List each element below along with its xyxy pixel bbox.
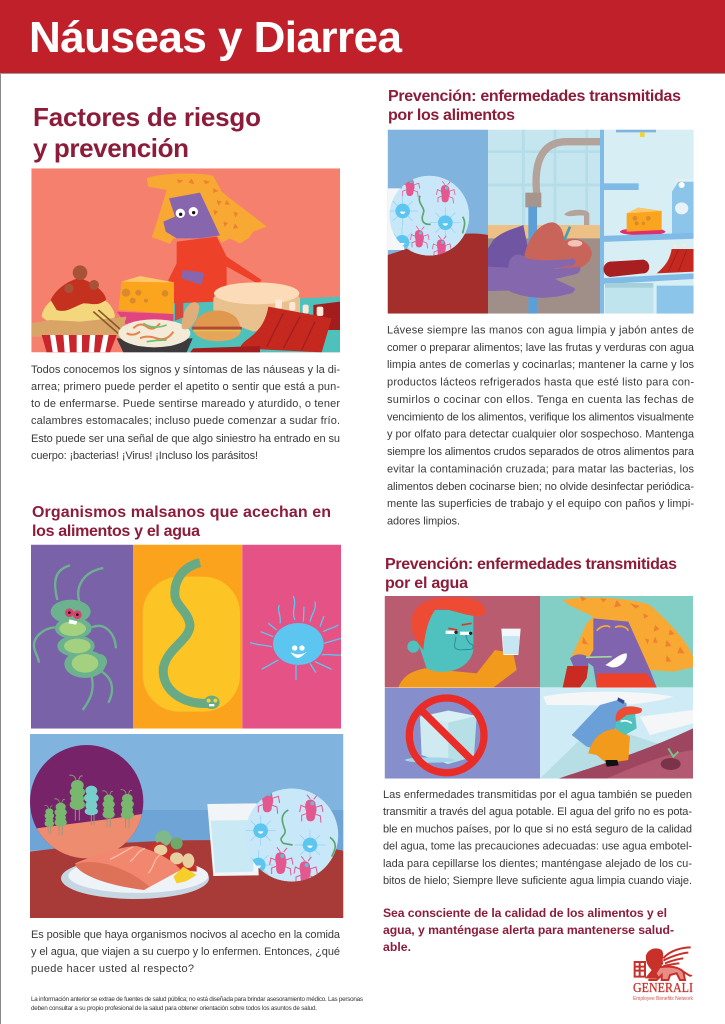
plate [61,866,209,899]
body text: waterborne prevention: lada para cepillarse los dientes; manténgase alejado de los cu- [383,858,692,870]
drawers [605,288,654,314]
body text: introduction: to de enfermarse. Puede sentirse mareado y aturdido, o tener [31,398,340,410]
logo wordmark: GENERALI [633,980,693,995]
illustration: foodborne prevention triptych [387,130,694,314]
wedge of cheese [117,312,173,325]
illustration: woman feeling sick at food table [31,168,340,352]
panel: virus [242,545,341,729]
body text: foodborne prevention: productos lácteos refrigerados hasta que esté listo para con- [387,377,694,389]
footnote disclaimer: deben consultar a su propio profesional de la salud para obtener orientación sobre todos los asuntos de salud. [31,1005,317,1012]
panel: washing an apple [488,130,602,314]
sweater [168,237,262,307]
illustration: waterborne prevention grid [385,596,693,779]
panel: refrigerator [600,130,694,314]
body text: foodborne prevention: y por olfato para detectar cualquier olor sospechoso. Mantenga [387,429,695,441]
callout: closing message [383,906,674,954]
body text: introduction: Esto puede ser una señal de que algo siniestro ha entrado en su [31,433,340,445]
vegetables [155,830,171,846]
ribs [657,249,694,273]
body text: waterborne prevention: Las enfermedades transmitidas por el agua también se pueden [383,789,692,801]
page edge [0,0,1,1024]
milk carton [672,182,694,235]
footnote disclaimer [31,996,363,1012]
table [167,297,340,352]
body text: foodborne prevention [387,324,695,528]
round cheese [213,296,300,332]
shelf cheese [620,229,666,235]
hair [147,174,267,244]
panel: worm [133,545,242,729]
body text: foodborne prevention: sumirlos o cocinar con ellos. Tenga en cuenta las fechas de [387,394,694,406]
table [30,840,343,918]
bread [182,302,199,329]
body text: foodborne prevention: mente las superficies de trabajo y el equipo con paños y limpi- [387,498,694,510]
body text: foodborne prevention: comer o preparar alimentos; lave las frutas y verduras con agua [387,342,695,354]
heading: risk factors: y prevención [33,133,189,163]
heading: harmful organisms: Organismos malsanos que acechan en [32,504,331,521]
header banner [0,0,725,74]
heading: foodborne prevention: Prevención: enfermedades transmitidas [388,88,681,105]
body text: introduction: Todos conocemos los signos y síntomas de las náuseas y la di- [31,364,340,376]
water jug [572,699,627,750]
body text: waterborne prevention: bitos de hielo; Siempre lleve suficiente agua limpia cuando viaje. [383,875,692,887]
water glass [207,803,259,876]
icon: winged lion [635,947,692,980]
no sign [409,698,484,773]
magnified bugs on food [30,743,145,860]
heading: harmful organisms [32,504,331,540]
body text: introduction: cuerpo: ¡bacterias! ¡Virus! ¡Incluso los parásitos! [31,450,258,462]
illustration: contaminated salmon and water [30,734,343,918]
heading: foodborne prevention: por los alimentos [388,107,515,124]
logo: Generali lion [633,947,693,1002]
heading: waterborne prevention [385,556,677,592]
noodle bowl [117,338,193,352]
logo tagline: Employee Benefits Network [633,996,693,1002]
panel: woman brushing teeth [540,596,693,688]
callout: closing message: agua, y manténgase alerta para mantenerse salud- [383,923,674,937]
ribs [313,302,340,330]
heading: waterborne prevention: Prevención: enfermedades transmitidas [385,556,677,573]
panel: man carrying water jug [540,688,693,779]
body text: foodborne prevention: alimentos deben cocinarse bien; no olvide desinfectar periódica- [387,481,694,493]
body text: foodborne prevention: Lávese siempre las manos con agua limpia y jabón antes de [387,324,694,336]
body text: what can you do: puede hacer usted al respecto? [31,963,194,975]
body text: introduction [31,364,340,462]
body text: foodborne prevention: evitar la contaminación cruzada; para matar las bacterias, los [387,463,694,475]
body text: foodborne prevention: limpia antes de comerlas y cocinarlas; mantener la carne y los [387,359,694,371]
heading: waterborne prevention: por el agua [385,575,468,592]
heading: risk factors: Factores de riesgo [33,102,261,132]
magnified microbes in water [243,786,338,884]
spaghetti [42,300,115,322]
body text: foodborne prevention: siempre los alimentos crudos separados de otros alimentos para [387,446,695,458]
face [163,193,220,238]
body text: what can you do [31,929,341,975]
striped bucket [42,335,117,352]
panel: no ice cubes [385,688,540,779]
body text: introduction: calambres estomacales; incluso puede comenzar a sudar frío. [31,415,340,427]
sausage [603,260,649,277]
callout: closing message: Sea consciente de la calidad de los alimentos y el [383,906,667,920]
body text: introduction: arrea; primero puede perder el apetito o sentir que está a pun- [31,381,340,393]
body text: foodborne prevention: adores limpios. [387,516,460,528]
title: Náuseas y Diarrea [29,13,403,62]
heading: risk factors [33,102,261,163]
body text: waterborne prevention [383,789,692,887]
burger [194,310,240,327]
body text: waterborne prevention: del agua, tome las precauciones adecuadas: use agua embotel- [383,841,692,853]
illustration: three organisms [31,545,341,729]
salmon [75,846,181,890]
carrier [588,729,630,763]
body text: what can you do: y el agua, que viajen a su cuerpo y lo enfermen. Entonces, ¿qué [31,946,340,958]
body text: waterborne prevention: ble en muchos países, por lo que si no está seguro de la calidad [383,823,692,835]
heading: foodborne prevention [388,88,681,124]
panel: man inspecting a glass of water [385,596,540,688]
heading: harmful organisms: los alimentos y el agua [32,523,200,540]
footnote disclaimer: La información anterior se extrae de fuentes de salud pública; no está diseñada para brindar asesoramiento médico. Las personas [31,996,363,1003]
panel: microbes on the table [387,130,488,314]
body text: waterborne prevention: transmitir a través del agua potable. El agua del grifo no es pota- [383,806,692,818]
fried food [31,317,127,337]
callout: closing message: able. [383,940,411,954]
body text: what can you do: Es posible que haya organismos nocivos al acecho en la comida [31,929,341,941]
panel: bacteria [31,545,133,729]
body text: foodborne prevention: vencimiento de los alimentos, verifique los alimentos visualmente [387,411,694,423]
